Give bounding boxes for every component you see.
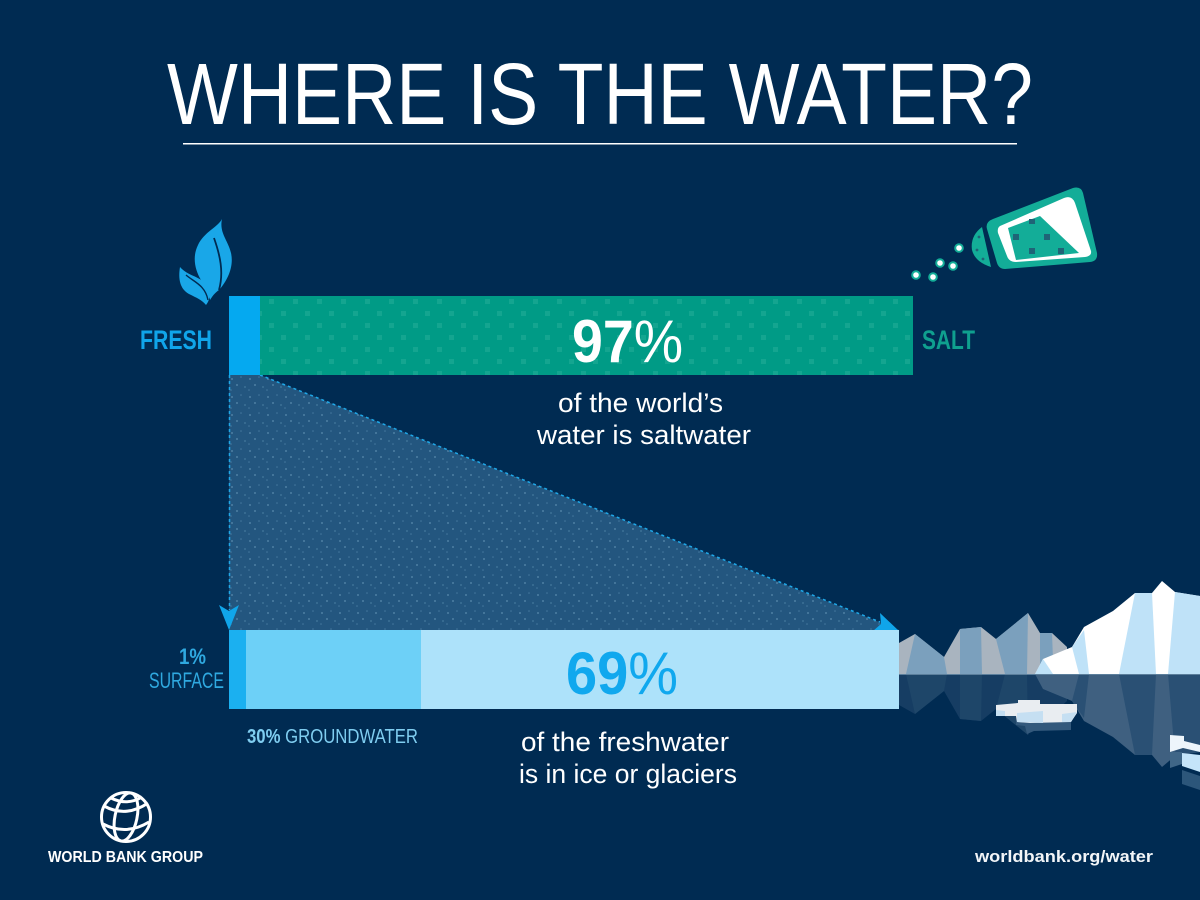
stat: 69 percent: 69%: [566, 640, 678, 707]
bar: freshwater breakdown: [229, 630, 899, 709]
illustration: icebergs and reflection: [899, 581, 1200, 790]
label: 30 percent groundwater: 30% GROUNDWATER: [247, 726, 418, 748]
label: salt: SALT: [922, 325, 975, 355]
reflection of main iceberg: [1035, 674, 1200, 767]
icon: fresh water leaves: [179, 219, 232, 305]
text: glacier caption: of the freshwater: [521, 727, 729, 757]
far mountains: [899, 613, 1067, 674]
arrow: right to glacier bar: [873, 613, 899, 631]
footer link text: worldbank.org/water: [974, 847, 1153, 866]
text: glacier caption: [519, 727, 737, 789]
reflection of far mountains: [899, 674, 1067, 735]
triangle: freshwater breakdown projection: [229, 375, 899, 630]
stat: 97 percent: 97%: [572, 308, 683, 375]
label: fresh: FRESH: [140, 325, 212, 355]
bar: fresh vs salt: [229, 296, 913, 375]
text: saltwater caption: [536, 388, 751, 450]
label: 1 percent surface: 1%: [179, 644, 206, 669]
arrow: down to surface bar: [219, 605, 239, 630]
label: 1 percent surface: [149, 644, 224, 693]
title: WHERE IS THE WATER?: [167, 46, 1033, 143]
corner floe: [1170, 735, 1200, 790]
main iceberg: [1035, 581, 1200, 674]
text: saltwater caption: water is saltwater: [536, 420, 751, 450]
logo: World Bank Group: [48, 791, 203, 866]
text: saltwater caption: of the world’s: [558, 388, 723, 418]
icon: salt shaker: [912, 188, 1097, 281]
logo: World Bank Group: WORLD BANK GROUP: [48, 849, 203, 866]
label: 1 percent surface: SURFACE: [149, 668, 224, 693]
ice floe: [996, 700, 1077, 734]
text: glacier caption: is in ice or glaciers: [519, 759, 737, 789]
